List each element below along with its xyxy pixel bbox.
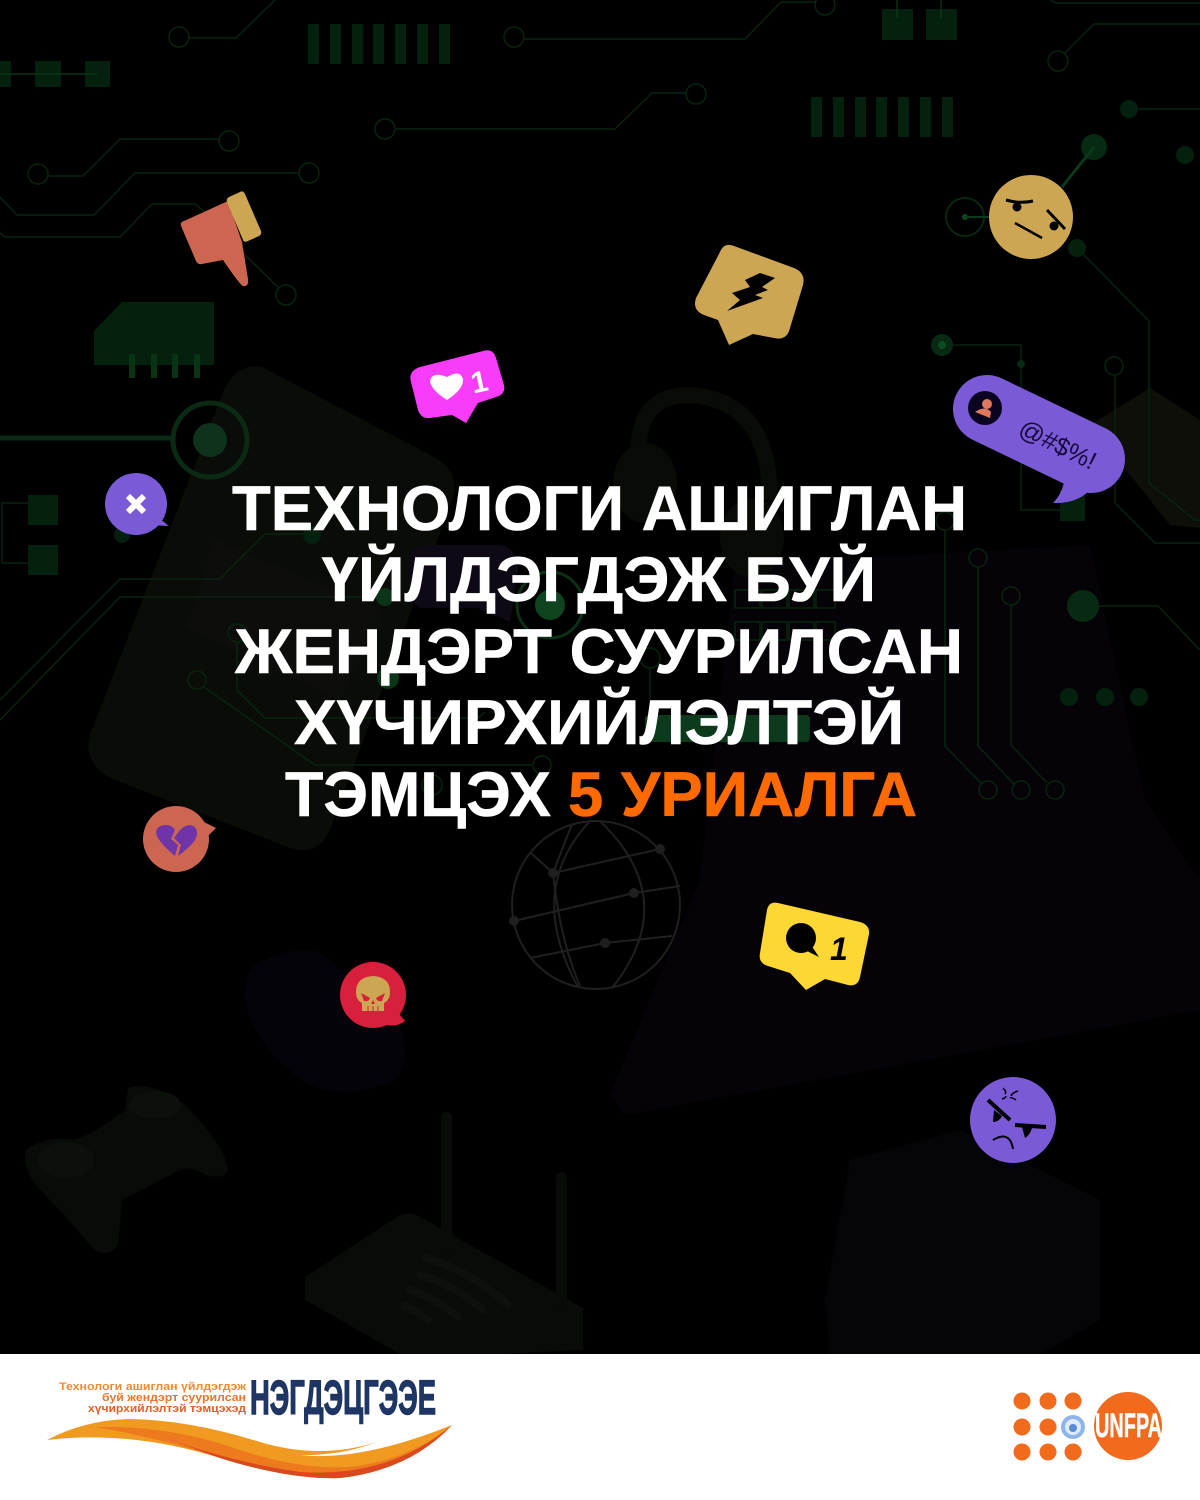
title: ҮЙЛДЭГДЭЖ БУЙ — [322, 544, 876, 615]
title — [232, 474, 967, 830]
title: ТЭМЦЭХ — [285, 760, 551, 830]
icon: furious face — [970, 1077, 1056, 1163]
faint far-right device — [1090, 388, 1200, 528]
faint headphones — [613, 395, 784, 578]
faint game controller — [25, 1086, 228, 1254]
icon: abusive message bubble — [968, 391, 1101, 503]
wire globe — [509, 821, 680, 989]
logo tagline: хүчирхийлэлтэй тэмцэхэд — [88, 1403, 246, 1415]
UNFPA logo — [1014, 1392, 1162, 1460]
faint speech bubble behind title — [409, 545, 518, 622]
icon: close bubble — [105, 473, 169, 535]
icon: thumbs down — [181, 191, 261, 286]
title: 5 УРИАЛГА — [568, 760, 917, 830]
icon: heart notification: 1 — [468, 365, 491, 400]
circuit accents — [0, 0, 1107, 742]
footer band — [0, 1354, 1200, 1500]
faint laptop silhouette — [610, 545, 1200, 1115]
icon: lightning bubble — [695, 245, 804, 345]
circuit lines — [0, 0, 1200, 799]
icon: skull bubble — [340, 962, 406, 1028]
icon: angry face — [989, 175, 1073, 259]
title: ЖЕНДЭРТ СУУРИЛСАН — [234, 617, 963, 687]
logo swoosh — [47, 1419, 452, 1478]
circuit blocks and nodes — [0, 9, 1194, 706]
icon: heart notification — [410, 350, 504, 423]
faint device lower right — [825, 1130, 1100, 1354]
campaign logo — [47, 1372, 452, 1478]
title: ХҮЧИРХИЙЛЭЛТЭЙ — [294, 687, 904, 758]
faint tablet silhouette — [245, 950, 405, 1091]
logo wordmark: НЭГДЭЦГЭЭЕ — [250, 1372, 436, 1425]
faint phone silhouette — [88, 366, 454, 850]
logo tagline: Технологи ашиглан үйлдэгдэж — [59, 1381, 246, 1393]
faint router — [305, 1112, 583, 1354]
logo tagline: буй жендэрт суурилсан — [102, 1392, 246, 1404]
icon: broken heart bubble — [143, 806, 216, 872]
title: ТЕХНОЛОГИ АШИГЛАН — [232, 474, 967, 544]
icon: comment notification — [760, 903, 869, 990]
icon: comment notification: 1 — [830, 931, 848, 967]
icon: abusive message bubble: @#$%! — [1014, 414, 1101, 476]
UN emblem — [1061, 1415, 1085, 1439]
logo tagline — [59, 1381, 246, 1415]
